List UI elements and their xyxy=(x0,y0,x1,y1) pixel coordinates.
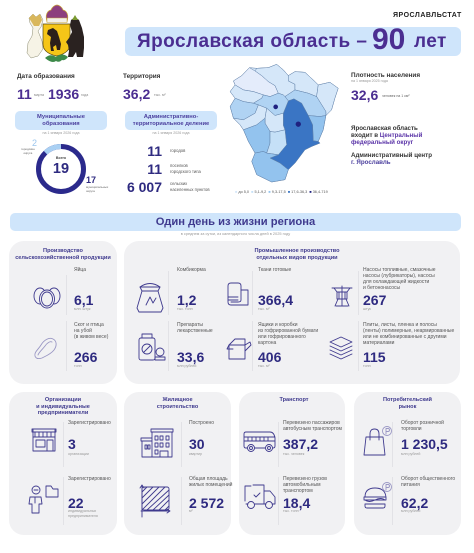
stat: livestock: тонн xyxy=(74,364,82,368)
title banner xyxy=(125,27,461,56)
stat: eggs: Яйца xyxy=(74,267,86,273)
stat: cargo: 18,4 xyxy=(283,495,310,511)
panel heading: Организации xyxy=(45,397,81,403)
heading: administrative division xyxy=(125,111,217,130)
stat: cargo: транспортом xyxy=(283,488,313,494)
stat: living area: Общая площадь xyxy=(189,476,228,482)
map: population density by district xyxy=(230,64,338,182)
donut label: municipal districts: муниципальных xyxy=(86,184,108,188)
panel: housing xyxy=(124,392,231,535)
panel heading xyxy=(36,397,90,416)
heading: municipalities: образования xyxy=(42,121,80,127)
stat: feed xyxy=(177,266,206,311)
stats: settlements: сельских xyxy=(170,181,187,186)
fact: founding date xyxy=(17,73,88,102)
text: federal district: Ярославская область xyxy=(351,125,418,132)
stat: feed: 1,2 xyxy=(177,292,196,308)
panel: agriculture xyxy=(9,241,117,384)
heading: administrative division: Административно- xyxy=(144,114,198,120)
donut label: urban districts: городские xyxy=(21,147,35,151)
stats: settlements: городов xyxy=(170,148,185,153)
stat: livestock: на убой xyxy=(74,328,92,334)
panel heading: предприниматели xyxy=(38,410,88,416)
icon: feed bag xyxy=(136,283,164,312)
stat: pumps: для охлаждающей жидкости xyxy=(363,279,429,285)
stats: settlements: 11 xyxy=(147,161,162,177)
panel heading xyxy=(354,397,461,410)
fact: territory: 36,2 xyxy=(123,86,150,102)
text: administrative centre: г. Ярославль xyxy=(351,159,391,166)
panel heading: Производство xyxy=(43,248,83,254)
panel heading: отдельных видов продукции xyxy=(256,254,338,260)
stat: retail turnover: торговли xyxy=(401,426,422,432)
stat: pumps: штук xyxy=(363,307,371,311)
stat: cardboard boxes: тыс. м² xyxy=(258,364,270,368)
stats: settlements: 6 007 xyxy=(127,179,162,195)
icon: bus xyxy=(243,431,276,453)
donut chart: municipalities: 19 xyxy=(53,161,69,177)
stats: settlements xyxy=(127,143,210,195)
stat: organizations: Зарегистрировано xyxy=(68,420,111,426)
stat: cardboard boxes: или гофрированного xyxy=(258,334,306,340)
section banner xyxy=(10,213,461,231)
fact: territory: Территория xyxy=(123,73,160,80)
text: administrative centre: Административный центр xyxy=(351,152,432,159)
stat: cargo: автомобильным xyxy=(283,482,321,488)
panel heading: Жилищное xyxy=(162,397,193,403)
title text: 90 xyxy=(372,23,405,56)
text: federal district: входит в Центральный xyxy=(351,132,422,139)
icon: shopping bag xyxy=(361,426,393,456)
panel: consumer market xyxy=(354,392,461,535)
stat: organizations: организации xyxy=(68,452,89,456)
donut label: urban districts xyxy=(21,138,37,155)
icon: medicine jar xyxy=(138,334,166,360)
fact: population density: Плотность населения xyxy=(351,72,420,79)
stat: polymer sheets: материалами xyxy=(363,340,394,346)
stat: entrepreneurs: 22 xyxy=(68,495,84,511)
stat: fabrics: 366,4 xyxy=(258,292,293,308)
stat: entrepreneurs xyxy=(68,476,111,518)
stat: cardboard boxes: 406 xyxy=(258,349,281,365)
stat: catering turnover: Оборот общественного xyxy=(401,476,455,482)
fact: founding date: Дата образования xyxy=(17,73,75,80)
panel heading xyxy=(254,248,340,260)
donut chart: municipalities xyxy=(21,138,108,194)
stat: apartments: квартир xyxy=(189,452,202,456)
donut label: urban districts: 2 xyxy=(32,138,37,148)
stat: retail turnover xyxy=(401,420,459,456)
stat: passengers: тыс. человек xyxy=(283,452,304,456)
panel heading: рынок xyxy=(399,404,416,410)
stat: polymer sheets: или не комбинированные с другими xyxy=(363,334,447,340)
panel heading: и индивидуальные xyxy=(36,404,90,410)
note: municipalities date: на 1 января 2026 года xyxy=(43,131,79,135)
section note: в среднем за сутки, из календарного числа дней в 2025 году xyxy=(181,231,290,236)
icon: store xyxy=(32,428,56,452)
stat: catering turnover: млн рублей xyxy=(401,509,420,513)
fact: founding date: 11 xyxy=(17,86,32,102)
logo text: Yaroslavlstat: ЯРОСЛАВЛЬСТАТ xyxy=(393,12,462,19)
stat: polymer sheets: (ленты) полимерные, неармированные xyxy=(363,328,454,334)
stat: feed: Комбикорма xyxy=(177,267,206,273)
stat: cardboard boxes: картона xyxy=(258,340,276,346)
stat: entrepreneurs: индивидуальных xyxy=(68,509,96,513)
heading: municipalities: Муниципальные xyxy=(37,114,85,120)
stat: cargo xyxy=(283,476,343,514)
panel heading: Потребительский xyxy=(383,397,432,403)
icon: entrepreneur xyxy=(28,486,58,514)
stat: eggs: 6,1 xyxy=(74,292,93,308)
stat: medicines: лекарственные xyxy=(177,328,213,334)
fact: founding date: года xyxy=(81,93,88,97)
icon: layered sheets xyxy=(330,336,352,360)
stat: retail turnover: 1 230,5 xyxy=(401,436,448,452)
icon: coat of arms xyxy=(26,4,84,62)
stat: livestock xyxy=(74,322,108,368)
stat: fabrics: тыс. м² xyxy=(258,307,270,311)
stat: living area: 2 572 xyxy=(189,495,224,511)
stats: settlements: 11 xyxy=(147,143,162,159)
stat: cardboard boxes: из гофрированной бумаги xyxy=(258,328,318,334)
section title: Один день из жизни региона xyxy=(156,216,315,228)
stat: cargo: тыс. тонн xyxy=(283,509,299,513)
heading: municipalities xyxy=(15,111,107,130)
stat: living area xyxy=(189,476,229,514)
stat: livestock: (в живом весе) xyxy=(74,334,108,340)
title text xyxy=(137,23,447,56)
stat: living area: м² xyxy=(189,509,193,513)
stat: living area: жилых помещений xyxy=(189,482,232,488)
icon: fabric roll xyxy=(228,282,248,306)
stat: catering turnover: питания xyxy=(401,482,420,488)
text: administrative centre xyxy=(351,152,432,166)
stat: retail turnover: млн рублей xyxy=(401,452,420,456)
fact: territory: тыс. м² xyxy=(154,93,166,97)
stat: polymer sheets: тонн xyxy=(363,364,371,368)
title text: Ярославская область – xyxy=(137,31,367,52)
fact: founding date: 1936 xyxy=(48,86,79,102)
stat: organizations: 3 xyxy=(68,436,76,452)
stat: organizations xyxy=(68,420,111,456)
panel heading: строительство xyxy=(157,404,198,410)
panel heading xyxy=(15,248,111,260)
stats: settlements: поселков xyxy=(170,163,188,168)
stat: pumps: и бетононасосы xyxy=(363,285,400,291)
fact: population density xyxy=(351,72,420,103)
stats: settlements: городского типа xyxy=(170,169,201,174)
stat: medicines: 33,6 xyxy=(177,349,204,365)
stats: settlements: населенных пунктов xyxy=(170,187,210,192)
stat: entrepreneurs: предпринимателя xyxy=(68,514,98,518)
stat: polymer sheets: Плиты, листы, пленка и полосы xyxy=(363,322,437,328)
stat: fabrics xyxy=(258,267,293,311)
stat: medicines xyxy=(177,322,213,368)
stat: catering turnover: 62,2 xyxy=(401,495,428,511)
fact: population density: 32,6 xyxy=(351,87,378,103)
panel heading xyxy=(157,397,198,410)
stat: apartments xyxy=(189,420,214,456)
stat: polymer sheets: 115 xyxy=(363,349,386,365)
stat: retail turnover: Оборот розничной xyxy=(401,420,444,426)
donut chart: municipalities: округа xyxy=(24,151,32,155)
stat: eggs xyxy=(74,267,94,311)
note: administrative date: на 1 января 2026 года xyxy=(153,131,189,135)
icon: meat xyxy=(34,338,57,359)
stat: livestock: Скот и птица xyxy=(74,322,104,328)
stat: livestock: 266 xyxy=(74,349,97,365)
panel: organizations xyxy=(9,392,117,535)
stat: medicines: млн рублей xyxy=(177,364,196,368)
fact: territory xyxy=(123,73,166,102)
fact: founding date: марта xyxy=(34,93,44,97)
stat: polymer sheets xyxy=(363,322,454,368)
heading: administrative division: территориальное деление xyxy=(133,121,209,127)
stat: eggs: млн. штук xyxy=(74,307,90,311)
stat: fabrics: Ткани готовые xyxy=(258,267,291,273)
panel heading: Промышленное производство xyxy=(254,248,340,254)
stat: medicines: Препараты xyxy=(177,322,203,328)
stat: catering turnover xyxy=(401,476,459,514)
stat: cargo: Перевезено грузов xyxy=(283,476,327,482)
icon: burger xyxy=(363,482,393,510)
stat: cardboard boxes xyxy=(258,322,318,368)
stat: pumps xyxy=(363,267,436,311)
icon: truck xyxy=(244,484,277,510)
icon: cardboard box xyxy=(226,338,252,360)
stat: apartments: Построено xyxy=(189,420,214,426)
stat: entrepreneurs: Зарегистрировано xyxy=(68,476,111,482)
text: federal district xyxy=(351,125,422,146)
panel: industry xyxy=(124,241,460,384)
donut total: Всего xyxy=(56,156,66,160)
title text: лет xyxy=(414,31,447,52)
stat: cardboard boxes: Ящики и коробки xyxy=(258,322,298,328)
fact: population density: на 1 января 2025 года xyxy=(351,79,388,83)
stat: feed: тыс. тонн xyxy=(177,307,193,311)
icon: pump xyxy=(332,286,352,306)
text: federal district: федеральный округ xyxy=(351,139,413,146)
fact: population density: человек на 1 км² xyxy=(382,94,410,98)
map legend: ■ до 5,0 ■ 5,1-9,2 ■ 9,3-17,5 ■ 17,6-36,3 ■ 36,4-719 xyxy=(235,190,328,194)
stat: passengers xyxy=(283,420,343,456)
stat: passengers: Перевезено пассажиров xyxy=(283,420,340,426)
panel: transport xyxy=(239,392,345,535)
stat: pumps: Насосы топливные, смазочные xyxy=(363,267,436,273)
donut label: municipal districts xyxy=(86,175,108,193)
panel heading: Транспорт xyxy=(279,397,309,403)
icon: floor area xyxy=(140,484,170,518)
donut label: municipal districts: 17 xyxy=(86,175,96,185)
stat: pumps: 267 xyxy=(363,292,386,308)
icon: eggs xyxy=(34,288,60,308)
stat: apartments: 30 xyxy=(189,436,205,452)
stat: pumps: насосы (лубрикаторы), насосы xyxy=(363,273,435,279)
panel heading: сельскохозяйственной продукции xyxy=(15,254,111,260)
icon: apartment building xyxy=(140,428,174,458)
donut label: municipal districts: округа xyxy=(86,189,95,193)
stat: passengers: автобусным транспортом xyxy=(283,426,342,432)
stat: passengers: 387,2 xyxy=(283,436,318,452)
